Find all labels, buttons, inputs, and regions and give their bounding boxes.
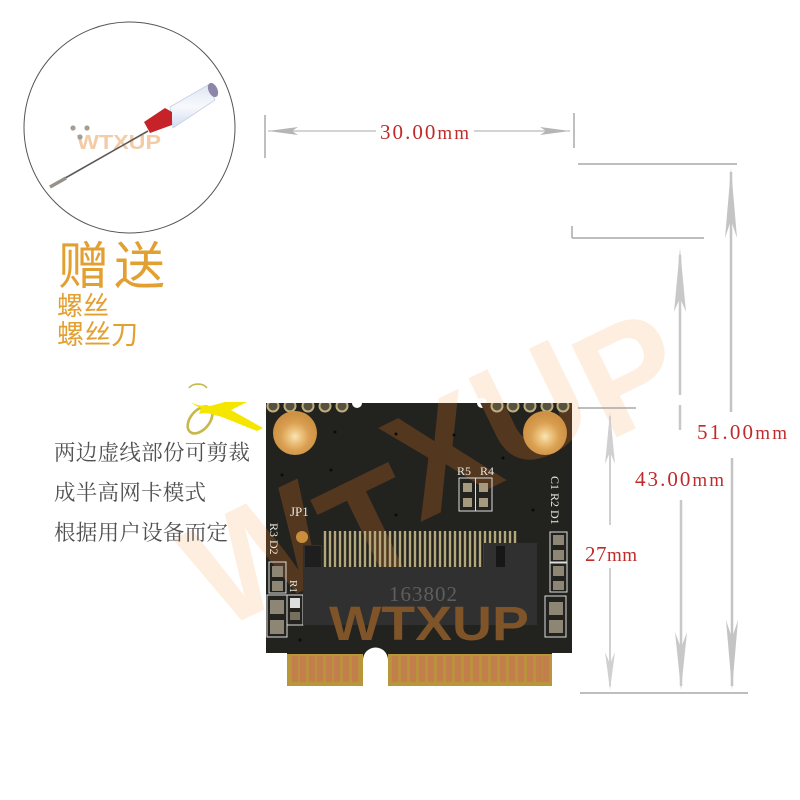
text: cutting note: 成半高网卡模式 [54,481,206,505]
silkscreen labels: JP1 [290,504,309,519]
dimension: 27mm height: 27mm [585,542,637,566]
dimension: 51.00mm height: 51.00mm [697,420,787,444]
watermark: large diagonal WTXUP: T [294,432,449,622]
gift panel: screwdriver circle [24,22,235,233]
watermark: large diagonal WTXUP: X [360,357,522,551]
gold dot JP1 [296,531,308,543]
heading: gift: 赠送 [58,238,165,295]
dimension: 43.00mm height: 43.00mm [635,467,724,491]
top notches [352,398,487,408]
mounting holes [273,411,567,455]
small watermark on connector: WTXUP [329,598,529,651]
watermark: large diagonal WTXUP: P [548,277,710,471]
vias [280,430,534,642]
silkscreen labels: C1 R2 D1 [548,476,562,525]
watermark band on board [266,403,572,594]
right pads [545,532,567,637]
text: screwdriver: 螺丝刀 [57,320,138,350]
watermark band on board: W [158,448,359,661]
dimension: 27mm height [585,412,637,690]
product: mini PCIe card [266,398,572,686]
left pads [267,562,303,637]
watermark band on board: U [446,306,615,504]
watermark band on board: X [360,357,522,551]
silkscreen labels: R4 [480,464,494,478]
icon: scissors [183,384,263,438]
text: cutting note: 根据用户设备而定 [54,521,228,545]
silkscreen labels: R1 [287,580,299,593]
watermark: large diagonal WTXUP: U [446,306,615,504]
silkscreen labels: R5 [457,464,471,478]
text: cutting note [54,441,250,545]
board body [266,403,572,686]
gold fingers [287,654,552,686]
connector pins [325,531,515,567]
text: cutting note: 两边虚线部份可剪裁 [54,441,250,465]
connector housing: 163802 [389,582,458,606]
text: screws: 螺丝 [57,291,109,321]
silkscreen labels: R3 D2 [267,523,281,555]
watermark band on board: P [548,277,710,471]
R5 R4 pads [459,478,492,511]
dimension: 30.00mm width: 30.00mm [380,120,469,144]
silkscreen labels [267,464,562,593]
icon: screws [70,125,90,140]
small watermark on photo: WTXUP [77,132,161,154]
dimension: 51.00mm height [697,168,787,690]
connector housing [303,543,537,625]
castellated holes [266,403,570,412]
reference lines [572,164,748,693]
watermark: large diagonal WTXUP [152,263,721,683]
watermark band on board: T [294,432,449,622]
dimension: 43.00mm height [635,248,724,690]
dimension: 30.00mm width [265,113,574,158]
watermark: large diagonal WTXUP: W [158,448,359,661]
icon: screwdriver [50,81,220,187]
